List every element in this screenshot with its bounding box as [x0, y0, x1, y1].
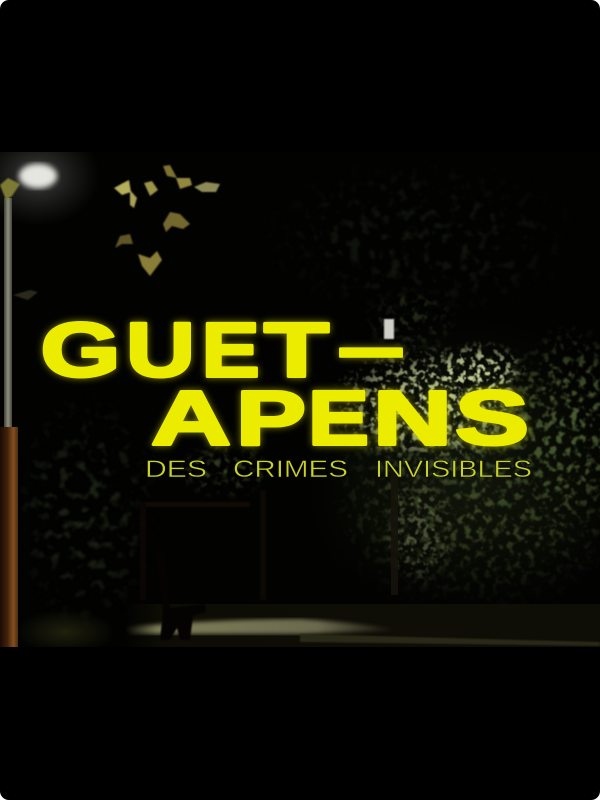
- silhouette walking on the path: [160, 604, 205, 640]
- title dash: —: [340, 302, 402, 391]
- title line 2: N: [373, 376, 452, 462]
- street lamp: [0, 152, 89, 647]
- subtitle word: crimes: CRIMES: [233, 456, 348, 483]
- foliage: upper canopy: [315, 179, 535, 348]
- foliage: right hedge: [330, 328, 600, 596]
- title line 2: P: [236, 376, 306, 462]
- subtitle: [145, 456, 532, 483]
- title line 2: [151, 376, 529, 462]
- hanging leaves: [13, 165, 220, 300]
- subtitle word: invisibles: INVISIBLES: [375, 456, 532, 483]
- title line 2: A: [151, 376, 231, 462]
- distant lamp: [384, 319, 394, 339]
- night park photograph: [0, 126, 600, 654]
- brown fence in the background: [140, 490, 266, 600]
- title line 1: G: [40, 308, 120, 394]
- title: [40, 302, 529, 462]
- foliage above the fence: [181, 446, 268, 497]
- title line 2: E: [308, 376, 369, 462]
- foliage: left bush: [25, 426, 145, 647]
- title line 1: U: [126, 308, 195, 394]
- title line 1: T: [264, 308, 329, 394]
- subtitle word: des: DES: [145, 456, 207, 483]
- lit path: [125, 604, 600, 647]
- title line 1: E: [202, 308, 260, 394]
- title line 1: [40, 308, 329, 394]
- title line 2: S: [455, 376, 529, 462]
